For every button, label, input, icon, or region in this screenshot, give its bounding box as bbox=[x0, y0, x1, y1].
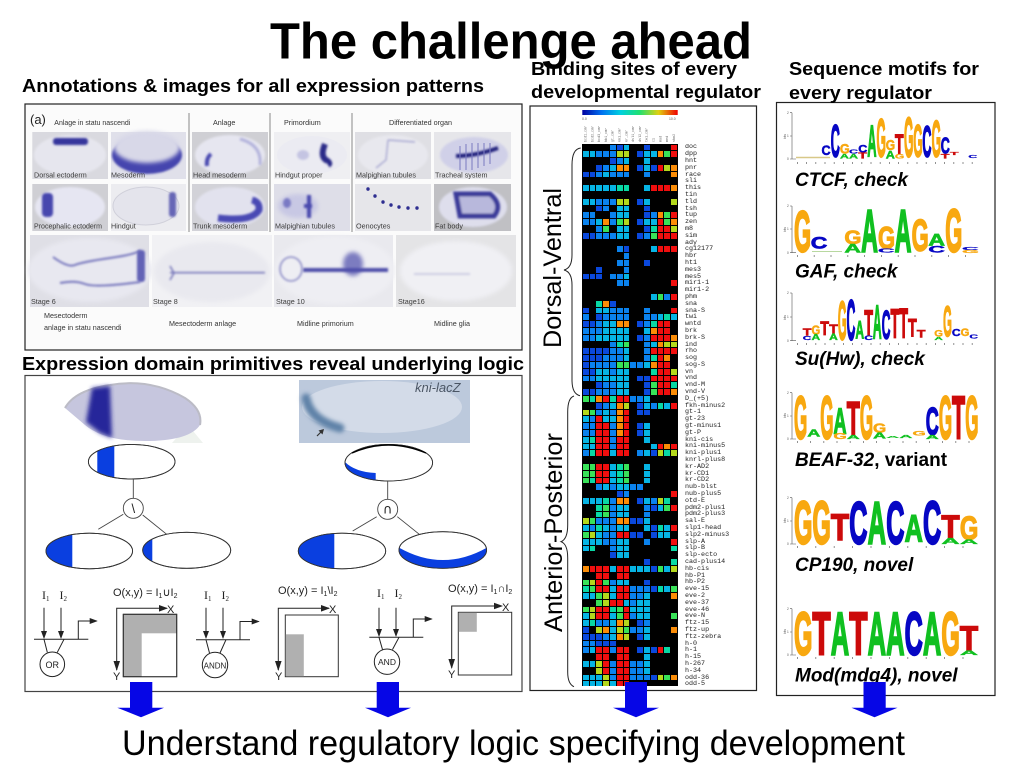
logo: CTCF: G bbox=[886, 137, 895, 153]
logo: GAF: C bbox=[811, 234, 827, 252]
logo: Mod(mdg4): A bbox=[923, 599, 941, 667]
image: kni-lacZ embryo bbox=[299, 380, 470, 443]
image: malpighian tubules: Malpighian tubules bbox=[356, 170, 416, 179]
logo: BEAF-32 bbox=[783, 384, 978, 471]
logo: CTCF: C bbox=[831, 117, 840, 168]
logo: CTCF: G bbox=[904, 106, 913, 169]
heading: sequence motifs: Sequence motifs for bbox=[789, 59, 979, 79]
logo: BEAF-32: A bbox=[873, 431, 886, 440]
chart: OR output: Y bbox=[113, 671, 121, 683]
column labels: twi_cmr bbox=[645, 128, 650, 142]
logo: GAF: G bbox=[844, 227, 861, 249]
column labels: bcd3_cmr bbox=[597, 126, 602, 142]
image: stage 16 bbox=[396, 235, 516, 307]
logo: GAF: C bbox=[878, 247, 895, 254]
image: malpighian tubules primordium: Malpighian tubules bbox=[275, 221, 335, 230]
column labels: kni_cmr bbox=[618, 128, 622, 142]
logo: Mod(mdg4): 0 bbox=[787, 653, 789, 657]
logo: CP190 bbox=[783, 488, 978, 576]
image: trunk mesoderm: Trunk mesoderm bbox=[193, 221, 247, 230]
arrow: sequence motifs bbox=[852, 682, 898, 717]
logo: CTCF: G bbox=[876, 110, 886, 169]
logo: CP190: 2 bbox=[787, 496, 789, 500]
logo: BEAF-32: A bbox=[886, 435, 899, 439]
gate: ANDN: I bbox=[222, 588, 226, 602]
gate: OR: 2 bbox=[64, 595, 68, 603]
logo: Mod(mdg4): A bbox=[960, 649, 978, 656]
operator: set difference bbox=[123, 498, 143, 518]
colour scale: 10.0 bbox=[669, 117, 676, 121]
ellipse: output ventral patch bbox=[340, 444, 433, 482]
image: malpighian tubules bbox=[355, 132, 431, 179]
logo: Su(Hw): 1 bbox=[787, 315, 789, 319]
logo: CP190: A bbox=[960, 538, 978, 545]
ellipse: ventral crescent bbox=[398, 532, 488, 570]
logo: Su(Hw): A bbox=[873, 297, 882, 349]
label: Mod(mdg4): Mod(mdg4), novel bbox=[795, 666, 958, 687]
logo: BEAF-32: A bbox=[899, 434, 913, 439]
stage captions: Midline glia bbox=[434, 319, 470, 328]
panel: annotations and images of expression patterns bbox=[25, 104, 522, 350]
chart: OR output: X bbox=[167, 604, 175, 616]
logo: CP190: T bbox=[941, 508, 960, 546]
logo: CTCF: C bbox=[922, 117, 932, 166]
logo: CTCF: 1 bbox=[787, 134, 789, 138]
image: stage 10: Stage 10 bbox=[276, 297, 305, 306]
logo: CP190: bits bbox=[783, 518, 787, 523]
logo: Mod(mdg4): T bbox=[849, 601, 868, 668]
chart: ANDN output: X bbox=[329, 604, 337, 616]
logo: CP190: 0 bbox=[787, 542, 789, 546]
chart: ANDN output: 1 bbox=[324, 591, 328, 598]
logo: CTCF: C bbox=[941, 132, 950, 158]
image: hindgut: Hindgut bbox=[111, 221, 136, 230]
logo: CTCF: G bbox=[840, 141, 850, 156]
logo: CP190: G bbox=[812, 488, 831, 556]
chart: AND output: I bbox=[505, 583, 508, 595]
image: trunk mesoderm bbox=[192, 184, 268, 231]
chart: ANDN output: Y bbox=[275, 671, 283, 683]
logo: Su(Hw): T bbox=[829, 322, 839, 336]
chart: AND output: 2 bbox=[508, 589, 512, 596]
stage captions: Mesectoderm bbox=[44, 311, 88, 320]
logo: Su(Hw): T bbox=[820, 318, 830, 340]
logo: BEAF-32: T bbox=[952, 384, 965, 452]
image: head mesoderm: Head mesoderm bbox=[193, 170, 246, 179]
chart: AND output: X bbox=[502, 602, 510, 614]
image: dorsal ectoderm: Dorsal ectoderm bbox=[34, 170, 87, 179]
column headers: Primordium bbox=[284, 118, 321, 127]
logo: CTCF: C bbox=[858, 142, 868, 155]
brace: dorsal-ventral bbox=[564, 148, 581, 396]
ellipse: input two bbox=[142, 532, 231, 569]
logo: Mod(mdg4): bits bbox=[783, 629, 787, 634]
gate: ANDN bbox=[196, 588, 259, 678]
logo: CTCF: G bbox=[895, 153, 905, 160]
image: stage 10 bbox=[274, 235, 395, 307]
logo: GAF: A bbox=[895, 198, 911, 265]
column labels: shn2 bbox=[672, 134, 677, 142]
logo: BEAF-32: A bbox=[847, 434, 860, 440]
image: mesoderm bbox=[111, 131, 186, 179]
heatmap: regulator names: doc dpp hnt pnr race sli this tin tld tsh tup zen m8 sim ady cg12177 hbr ht1 mes3 mes5 mir1-1 mir1-2 phm sna sna-S twi wntd brk brk-S ind rho sog sog-S vn vnd vnd-M vnd-V D_(+5) fkh-minus2 gt-1 gt-23 gt-minus1 gt-P kni-cis kni-minus5 kni-plus1 knrl-plus8 kr-AD2 kr-CD1 kr-CD2 nub-blst nub-plus5 otd-E pdm2-plus1 pdm2-plus3 sal-E slp1-head slp2-minus3 slp-A slp-B slp-ecto cad-plus14 hb-cis hb-P1 hb-P2 eve-15 eve-2 eve-37 eve-46 eve-N ftz-15 ftz-up ftz-zebra h-0 h-1 h-15 h-267 h-34 odd-36 odd-5 bbox=[685, 144, 729, 686]
logo: Su(Hw): C bbox=[969, 334, 978, 341]
gate: OR: I bbox=[42, 588, 46, 602]
logo: Mod(mdg4): G bbox=[941, 599, 960, 667]
arrow: expression primitives two bbox=[365, 682, 411, 717]
colour scale: 0.0 bbox=[582, 117, 587, 121]
image: dorsal ectoderm bbox=[32, 132, 108, 179]
logo: Su(Hw): C bbox=[952, 328, 961, 339]
logo: BEAF-32: 0 bbox=[787, 437, 789, 441]
logo: GAF: 2 bbox=[787, 204, 789, 208]
image: oenocytes bbox=[355, 184, 431, 231]
logo: BEAF-32: 1 bbox=[787, 414, 789, 418]
image: stage 16: Stage16 bbox=[398, 297, 425, 306]
gate: ANDN: ANDN bbox=[204, 662, 227, 670]
label: anterior-posterior: Anterior-Posterior bbox=[540, 433, 568, 632]
column labels: bcd1_cmr bbox=[584, 126, 588, 142]
logo: BEAF-32: G bbox=[912, 429, 926, 437]
logo: BEAF-32: T bbox=[847, 393, 860, 445]
conclusion text: Understand regulatory logic specifying development bbox=[122, 724, 905, 763]
logo: Su(Hw): T bbox=[917, 327, 926, 340]
logo: GAF: A bbox=[844, 242, 861, 255]
gate: AND: I bbox=[394, 586, 398, 600]
gate: OR: I bbox=[60, 588, 64, 602]
chart: ANDN output: \ bbox=[327, 585, 331, 597]
gate: OR: 1 bbox=[46, 595, 50, 603]
gate: AND: AND bbox=[378, 657, 396, 667]
logo: CTCF: A bbox=[867, 116, 877, 166]
logo: GAF: A bbox=[928, 231, 946, 250]
logo: GAF: C bbox=[928, 244, 945, 255]
column headers: Differentiated organ bbox=[389, 118, 452, 127]
logo: GAF: bits bbox=[783, 227, 787, 232]
column labels: mad bbox=[658, 136, 663, 142]
image: mesoderm: Mesoderm bbox=[111, 170, 145, 179]
logo: Mod(mdg4): T bbox=[812, 601, 831, 668]
logo: Su(Hw): T bbox=[803, 327, 812, 338]
logo: Su(Hw): C bbox=[803, 335, 812, 342]
logo: BEAF-32: G bbox=[834, 432, 847, 441]
stage captions bbox=[44, 311, 470, 332]
gate: OR: OR bbox=[46, 660, 60, 670]
heading: sequence motifs: every regulator bbox=[789, 83, 932, 103]
logo: BEAF-32: G bbox=[965, 385, 978, 452]
diagram: set difference tree bbox=[46, 444, 231, 570]
image: procephalic ectoderm: Procephalic ectoderm bbox=[34, 221, 102, 230]
logo: Su(Hw): T bbox=[899, 300, 908, 347]
gate: ANDN: I bbox=[204, 588, 208, 602]
heading: binding sites: developmental regulator bbox=[531, 82, 761, 102]
gate: ANDN: 2 bbox=[226, 595, 230, 603]
stage captions: Midline primorium bbox=[297, 319, 354, 328]
chart: AND output bbox=[448, 583, 512, 681]
label: GAF: GAF, check bbox=[795, 262, 899, 283]
heading: expression primitives: Expression domain primitives reveal underlying logic bbox=[22, 354, 524, 374]
column labels: hb1_cmr bbox=[604, 128, 609, 142]
image: stage 8: Stage 8 bbox=[153, 297, 178, 306]
logo: CTCF: A bbox=[886, 148, 895, 161]
chart: AND output: 1 bbox=[494, 589, 498, 596]
logo: CP190: A bbox=[941, 537, 960, 546]
chart: AND output: ∩ bbox=[497, 583, 505, 595]
image: kni-lacZ embryo: kni-lacZ bbox=[415, 380, 462, 395]
image: hindgut proper: Hindgut proper bbox=[275, 170, 323, 179]
image: oenocytes: Oenocytes bbox=[356, 221, 391, 230]
logo: CTCF: C bbox=[968, 154, 978, 159]
logo: Su(Hw): A bbox=[812, 334, 821, 342]
logo: Mod(mdg4): A bbox=[868, 599, 886, 667]
image: fat body: Fat body bbox=[435, 221, 463, 230]
stage captions: anlage in statu nascendi bbox=[44, 323, 122, 332]
logo: CTCF: C bbox=[849, 149, 858, 155]
logo: BEAF-32: G bbox=[820, 385, 834, 452]
logo: Mod(mdg4) bbox=[783, 599, 978, 687]
panel: binding sites heatmap frame bbox=[530, 106, 756, 690]
gate: AND: I bbox=[377, 586, 381, 600]
logo: CTCF: C bbox=[822, 143, 831, 158]
logo: Su(Hw): T bbox=[890, 300, 899, 347]
gate: AND: 1 bbox=[381, 593, 385, 601]
logo: BEAF-32: C bbox=[926, 401, 939, 443]
column labels: kr_cmr bbox=[624, 130, 629, 142]
column headers: Anlage in statu nascendi bbox=[54, 118, 131, 127]
image: fat body bbox=[434, 184, 511, 231]
logo: GAF: G bbox=[945, 197, 962, 265]
logo: CTCF: T bbox=[950, 152, 959, 156]
image: procephalic ectoderm bbox=[32, 184, 108, 231]
logo: Mod(mdg4): C bbox=[905, 599, 923, 667]
colour scale bbox=[582, 110, 678, 121]
image: tracheal system: Tracheal system bbox=[435, 170, 487, 179]
chart: ANDN output: I bbox=[330, 585, 334, 597]
chart: OR output bbox=[113, 587, 178, 683]
logo: GAF: G bbox=[794, 202, 811, 265]
logo: BEAF-32: A bbox=[807, 428, 821, 439]
column labels: ci bbox=[652, 138, 656, 142]
logo: Su(Hw): bits bbox=[783, 315, 787, 320]
logo: Mod(mdg4): A bbox=[886, 599, 904, 667]
column headers bbox=[54, 118, 452, 127]
logo: CP190: G bbox=[794, 488, 812, 556]
logo: CTCF: bits bbox=[783, 134, 787, 139]
column labels: med bbox=[665, 136, 670, 142]
image: tracheal system bbox=[434, 132, 511, 179]
logo: CP190: A bbox=[905, 508, 923, 550]
column headers: Anlage bbox=[213, 118, 235, 127]
logo: BEAF-32: G bbox=[794, 385, 807, 452]
chart: ANDN output bbox=[275, 585, 338, 683]
logo: CP190: A bbox=[868, 490, 886, 556]
logo: Su(Hw): 2 bbox=[787, 291, 789, 295]
logo: GAF: G bbox=[962, 250, 979, 254]
label: dorsal-ventral: Dorsal-Ventral bbox=[539, 188, 567, 348]
heading: annotations: Annotations & images for all expression patterns bbox=[22, 76, 484, 96]
logo: CTCF: G bbox=[913, 117, 923, 168]
logo: Su(Hw): A bbox=[829, 332, 838, 343]
chart: OR output: ∪ bbox=[162, 587, 170, 599]
chart: ANDN output: 2 bbox=[334, 591, 338, 598]
logo: GAF: A bbox=[861, 198, 878, 265]
logo: CTCF: T bbox=[895, 128, 904, 160]
label: CTCF: CTCF, check bbox=[795, 170, 909, 191]
operator: intersection bbox=[378, 499, 398, 519]
column labels: gt_cmr bbox=[611, 130, 616, 142]
ellipse: anterior half bbox=[298, 533, 386, 570]
logo: CTCF: T bbox=[941, 153, 950, 160]
logo: Su(Hw): A bbox=[855, 317, 864, 345]
ellipse: input one bbox=[46, 533, 133, 570]
image: head mesoderm bbox=[192, 132, 268, 179]
label: CP190: CP190, novel bbox=[795, 555, 914, 576]
title: The challenge ahead bbox=[270, 12, 752, 69]
column labels: dsl1_cmr bbox=[631, 126, 636, 142]
chart: OR output: O(x,y) = I bbox=[113, 587, 159, 599]
logo: Mod(mdg4): 1 bbox=[787, 630, 789, 634]
logo: CTCF: A bbox=[840, 153, 850, 160]
gate: OR bbox=[34, 588, 97, 677]
logo: GAF: 1 bbox=[787, 227, 789, 231]
chart: AND output: O(x,y) = I bbox=[448, 583, 494, 595]
chart: OR output: 1 bbox=[159, 593, 163, 600]
image: stage 6 bbox=[28, 235, 152, 307]
gate: ANDN: 1 bbox=[208, 595, 212, 603]
logo: Mod(mdg4): A bbox=[831, 599, 849, 667]
logo: CTCF: T bbox=[858, 151, 868, 160]
stage captions: Mesectoderm anlage bbox=[169, 319, 236, 328]
image: hindgut bbox=[111, 184, 186, 231]
brace: anterior-posterior bbox=[561, 396, 574, 687]
logo: CP190: 1 bbox=[787, 519, 789, 523]
column labels: bcd2_cmr bbox=[590, 126, 595, 142]
logo: CTCF: 2 bbox=[787, 111, 789, 115]
chart: OR output: 2 bbox=[174, 593, 178, 600]
logo: GAF: 0 bbox=[787, 251, 789, 255]
logo: Su(Hw): C bbox=[847, 288, 855, 352]
logo: CP190: C bbox=[923, 489, 941, 556]
gate: AND: 2 bbox=[398, 593, 402, 601]
operator: set difference: \ bbox=[131, 501, 135, 516]
logo: Su(Hw): T bbox=[864, 304, 873, 343]
label: panel a: (a) bbox=[30, 112, 46, 127]
logo: BEAF-32: bits bbox=[783, 413, 787, 418]
heading: binding sites bbox=[531, 59, 761, 102]
label: BEAF-32: BEAF-32, variant bbox=[795, 450, 948, 471]
logo: GAF: G bbox=[912, 211, 929, 261]
logo: CTCF: 0 bbox=[787, 157, 789, 161]
chart: AND output: Y bbox=[448, 669, 456, 681]
logo: CTCF: A bbox=[849, 153, 859, 160]
logo: GAF: G bbox=[878, 219, 895, 255]
arrow: expression primitives one bbox=[117, 682, 164, 717]
logo: BEAF-32: A bbox=[834, 402, 847, 442]
logo: Su(Hw): C bbox=[864, 334, 873, 342]
image: stage 6: Stage 6 bbox=[31, 297, 56, 306]
logo: Mod(mdg4): 2 bbox=[787, 607, 789, 611]
panel: sequence motifs frame bbox=[776, 102, 995, 696]
logo: BEAF-32: A bbox=[926, 434, 939, 440]
panel: expression domain primitives bbox=[25, 376, 522, 692]
arrow: binding sites bbox=[613, 682, 659, 717]
logo: CTCF bbox=[783, 106, 978, 191]
logo: Su(Hw): G bbox=[934, 330, 943, 339]
logo: Su(Hw): 0 bbox=[787, 339, 789, 343]
column labels bbox=[584, 126, 677, 142]
logo: CP190: G bbox=[960, 510, 978, 547]
heading: sequence motifs bbox=[789, 59, 979, 103]
logo: BEAF-32: G bbox=[939, 385, 952, 452]
logo: CP190: T bbox=[831, 507, 849, 549]
chart: OR output: I bbox=[170, 587, 174, 599]
logo: Su(Hw): T bbox=[908, 316, 917, 343]
column dividers bbox=[189, 113, 352, 232]
label: panel b: (b) bbox=[30, 238, 46, 253]
logo: Su(Hw): C bbox=[882, 303, 890, 348]
image: malpighian tubules primordium bbox=[274, 184, 350, 231]
logo: Mod(mdg4): T bbox=[960, 619, 978, 657]
logo: Su(Hw): G bbox=[961, 327, 970, 339]
operator: intersection: ∩ bbox=[383, 502, 392, 518]
logo: Su(Hw): G bbox=[943, 298, 952, 346]
image: stage 8 bbox=[152, 235, 272, 307]
logo: BEAF-32: G bbox=[873, 422, 886, 436]
logo: GAF bbox=[783, 197, 979, 283]
label: Su(Hw): Su(Hw), check bbox=[795, 349, 926, 370]
image: hindgut proper bbox=[274, 132, 350, 179]
logo: Su(Hw): A bbox=[934, 336, 944, 341]
logo: Mod(mdg4): G bbox=[794, 599, 812, 667]
chart: ANDN output: O(x,y) = I bbox=[278, 585, 324, 597]
logo: Su(Hw): G bbox=[812, 323, 820, 337]
column labels: dsl2_cmr bbox=[638, 126, 643, 142]
diagram: intersection tree bbox=[298, 444, 488, 570]
logo: CP190: C bbox=[886, 490, 904, 556]
logo: BEAF-32: 2 bbox=[787, 391, 789, 395]
gate: AND bbox=[369, 586, 432, 674]
logo: Su(Hw) bbox=[783, 288, 978, 370]
heading: binding sites: Binding sites of every bbox=[531, 59, 737, 79]
logo: GAF: C bbox=[962, 246, 979, 251]
logo: CP190: C bbox=[849, 490, 868, 556]
ellipse: output stripe bbox=[88, 444, 175, 480]
image: embryo with stripe bbox=[65, 383, 203, 443]
heatmap: binding sites grid bbox=[582, 144, 678, 686]
logo: BEAF-32: G bbox=[860, 385, 873, 452]
logo: CTCF: G bbox=[932, 110, 941, 168]
logo: Su(Hw): G bbox=[838, 291, 847, 352]
